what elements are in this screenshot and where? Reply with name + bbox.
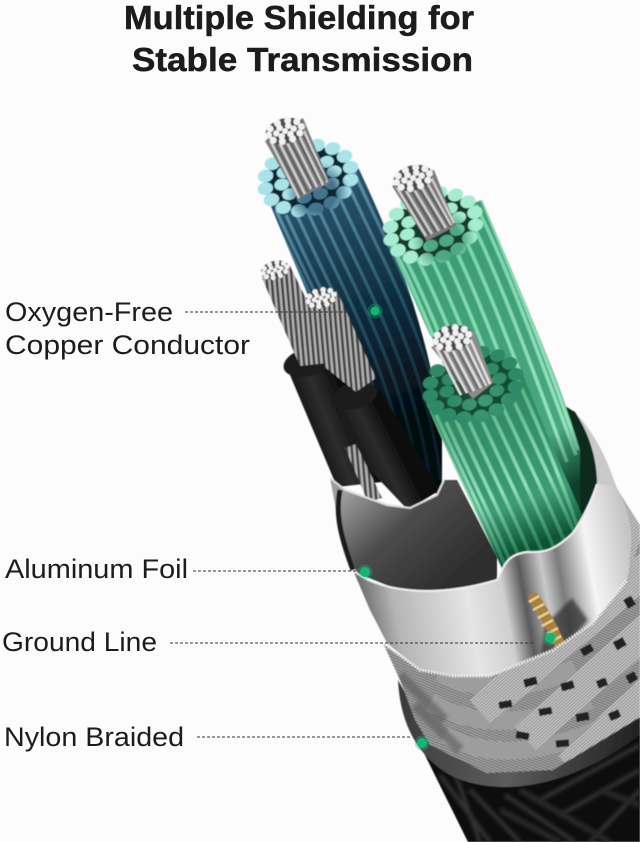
label: oxygen-free copper conductor: Oxygen-Free bbox=[5, 297, 173, 327]
label: ground line: Ground Line bbox=[2, 627, 157, 657]
braid sliver behind foil right edge bbox=[614, 484, 640, 590]
title bbox=[124, 0, 474, 78]
illustration: cable cross-section bbox=[248, 113, 640, 842]
label: ground line bbox=[2, 627, 558, 657]
aluminum foil front bbox=[330, 478, 631, 676]
ground line wire bbox=[529, 596, 588, 660]
silver conductor 3 bbox=[429, 321, 493, 399]
small silver conductor 1 bbox=[258, 257, 337, 366]
back rim of foil bbox=[570, 408, 616, 488]
tube inner shadow bbox=[530, 400, 597, 550]
label: nylon braided bbox=[4, 722, 430, 752]
blue bundle bbox=[257, 138, 443, 494]
nylon braid bbox=[383, 540, 640, 773]
braid stitched edge bbox=[383, 580, 627, 676]
black insulated wire 1 bbox=[280, 342, 400, 487]
green strand end caps bbox=[372, 174, 494, 278]
label: aluminum foil: Aluminum Foil bbox=[5, 554, 188, 584]
label: oxygen-free copper conductor: Copper Conductor bbox=[5, 330, 250, 360]
dark ring bbox=[398, 680, 640, 787]
silver conductor 2 bbox=[390, 160, 456, 241]
label: nylon braided: Nylon Braided bbox=[4, 722, 184, 752]
green bundle rear bbox=[372, 174, 580, 512]
black insulated wire 2 bbox=[327, 377, 440, 510]
title: Stable Transmission bbox=[132, 41, 473, 78]
black outer cable bbox=[415, 725, 640, 842]
green bundle front bbox=[422, 345, 582, 568]
small ground strand between wires bbox=[345, 444, 382, 502]
title: Multiple Shielding for bbox=[124, 0, 474, 36]
small silver conductor 2 bbox=[303, 284, 376, 392]
label: oxygen-free copper conductor bbox=[5, 297, 382, 360]
silver conductor 1 bbox=[262, 113, 330, 199]
deep green strand end caps bbox=[413, 335, 533, 435]
aluminum foil interior bbox=[330, 478, 497, 592]
blue strand end caps bbox=[248, 128, 368, 228]
label: aluminum foil bbox=[5, 554, 372, 584]
